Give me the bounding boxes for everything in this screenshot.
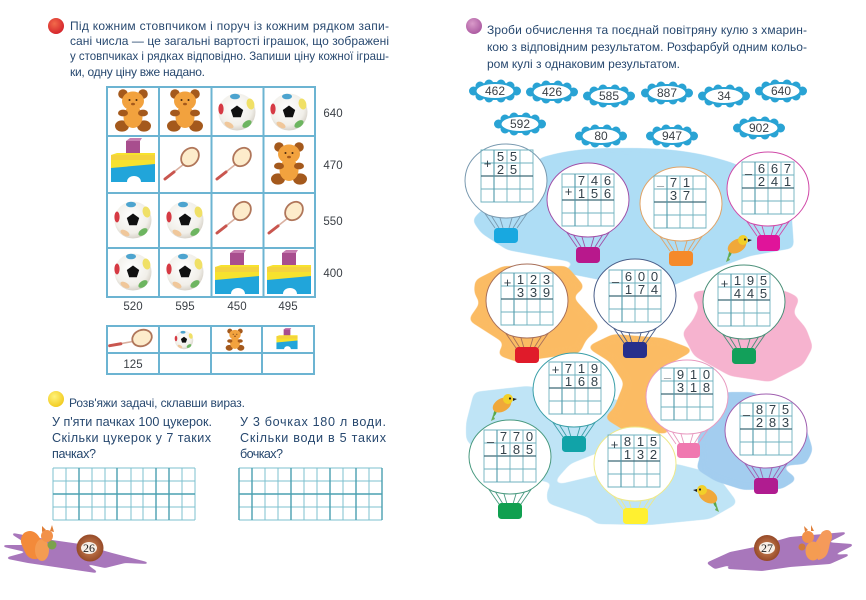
toy grid [107,87,315,297]
balloon 815 + 132: 132 [624,447,657,462]
balloon 815 + 132: 815 [624,434,657,449]
cloud 887 [641,82,693,104]
balloon 815 + 132: + [611,437,618,452]
cloud 34 [698,84,750,108]
balloon 123 + 339: 339 [517,285,550,300]
row totals: 640 [323,108,343,120]
cloud 585 [583,84,635,108]
cloud 80 [575,124,627,148]
balloon 746 + 156: 746 [578,173,611,188]
balloon 770 - 185 [469,420,551,519]
balloon 746 + 156: + [565,184,572,199]
answer grid left [53,468,195,520]
cloud 34: 34 [717,89,731,103]
balloon 123 + 339: + [504,275,511,290]
text block: task 1 instructions [70,19,389,79]
page 26 footer decoration [4,525,147,572]
balloon 875 - 283: 875 [756,402,789,417]
balloon 770 - 185: 770 [500,429,533,444]
balloon 719 + 168: + [552,362,559,377]
row totals: 550 [323,216,343,228]
answer clouds [469,80,807,148]
text block: task instructions: Зроби обчислення та поєднай повітряну кулю з хмарин- [487,23,807,37]
text block: second problem: У 3 бочках 180 л води. [240,415,386,429]
cloud 585: 585 [599,89,619,103]
balloon 910 - 318: – [664,370,672,385]
cloud 887: 887 [657,86,677,100]
balloon 746 + 156 [547,163,629,263]
text block: task instructions [487,23,807,71]
icon: bird lower [693,485,720,512]
balloon 815 + 132 [594,427,676,524]
text block: second problem [240,415,387,461]
balloon 71 - 37 [640,167,722,266]
balloon 667 - 241 [727,152,809,251]
text block: task 1 instructions: Під кожним стовпчиком і поруч із кожним рядком запи- [70,19,389,33]
text block: first problem: У п'яти пачках 100 цукерок. [52,415,212,429]
text block: task instructions: кою з відповідним результатом. Розфарбуй одним кольо- [487,40,807,54]
price table [107,315,314,374]
balloon 719 + 168: 168 [565,374,598,389]
cloud 80: 80 [594,129,608,143]
column totals: 450 [227,301,247,313]
text block: first problem: Скільки цукерок у 7 таких [52,431,212,445]
balloon 875 - 283: 283 [756,415,789,430]
page number 27 [754,535,780,561]
column totals: 520 [123,301,143,313]
icon: bird upper [725,235,752,262]
page 27 footer decoration [708,525,852,570]
column totals: 595 [175,301,195,313]
balloon 910 - 318: 318 [677,380,710,395]
cloud 462 [469,80,521,102]
panel: right page [465,18,813,525]
balloon 719 + 168 [533,353,615,452]
balloon 55 + 25: 25 [497,162,517,177]
balloon 55 + 25: + [484,156,491,171]
cloud 640: 640 [771,84,791,98]
balloon 667 - 241: 241 [758,174,791,189]
icon: squirrel right [798,525,832,560]
text block: first problem [52,415,212,461]
balloon 71 - 37: 71 [670,175,690,190]
balloon 123 + 339: 123 [517,272,550,287]
balloon 746 + 156: 156 [578,186,611,201]
icon: purple bullet [466,18,482,34]
balloon 719 + 168: 719 [565,361,598,376]
cloud 426 [526,80,578,104]
text block: first problem: пачках? [52,447,96,461]
balloon 875 - 283 [725,394,807,494]
balloon 770 - 185: – [487,434,495,449]
balloon 875 - 283: – [743,407,751,422]
icon: bird left [490,394,517,421]
cloud 592: 592 [510,117,530,131]
column totals [123,301,298,313]
icon: yellow bullet [48,391,64,407]
balloon 195 + 445: + [721,276,728,291]
cloud 947 [646,124,698,148]
balloon 195 + 445 [703,265,785,364]
text block: task 1 instructions: у стовпчиках і рядках відповідно. Запиши ціну кожної іграш- [70,49,389,63]
icon: red bullet [48,18,64,34]
balloon 600 - 174: 600 [625,269,658,284]
cloud 462: 462 [485,84,505,98]
balloon 71 - 37: – [657,178,665,193]
text block: task 1 instructions: сані числа — це загальні вартості іграшок, що зображені [70,34,389,48]
row totals: 470 [323,160,343,172]
balloon 770 - 185: 185 [500,442,533,457]
icon: squirrel left [21,525,56,561]
panel: left page task 1 [48,18,389,374]
row totals [323,108,343,280]
cloud 640 [755,80,807,102]
page number 26: 26 [83,541,95,555]
heading: task 2: Розв'яжи задачі, склавши вираз. [69,396,245,410]
page number 27: 27 [761,541,773,555]
background colour blobs [466,148,813,525]
cloud 947: 947 [662,129,682,143]
row totals: 400 [323,268,343,280]
cloud 426: 426 [542,85,562,99]
panel: left page task 2 [48,391,387,520]
balloon 55 + 25 [465,144,547,243]
balloon 195 + 445: 445 [734,286,767,301]
balloon 600 - 174: – [612,274,620,289]
balloon 71 - 37: 37 [670,188,690,203]
text block: task 1 instructions: ки, одну ціну вже надано. [70,65,205,79]
balloon 667 - 241: – [745,166,753,181]
cloud 902 [733,116,785,140]
balloon 195 + 445: 195 [734,273,767,288]
balloon 600 - 174 [594,259,676,358]
price table: 125 [123,359,143,371]
balloon 123 + 339 [486,264,568,363]
cloud 902: 902 [749,121,769,135]
column totals: 495 [278,301,298,313]
balloon 910 - 318: 910 [677,367,710,382]
cloud 592 [494,112,546,136]
text block: task instructions: ром кулі з однаковим результатом. [487,57,680,71]
balloon 667 - 241: 667 [758,161,791,176]
balloon 600 - 174: 174 [625,282,658,297]
answer grid right [239,468,382,520]
balloon 910 - 318 [646,360,728,458]
page number 26 [76,534,104,562]
balloon 55 + 25: 55 [497,149,517,164]
text block: second problem: бочках? [240,447,283,461]
text block: second problem: Скільки води в 5 таких [240,431,387,445]
